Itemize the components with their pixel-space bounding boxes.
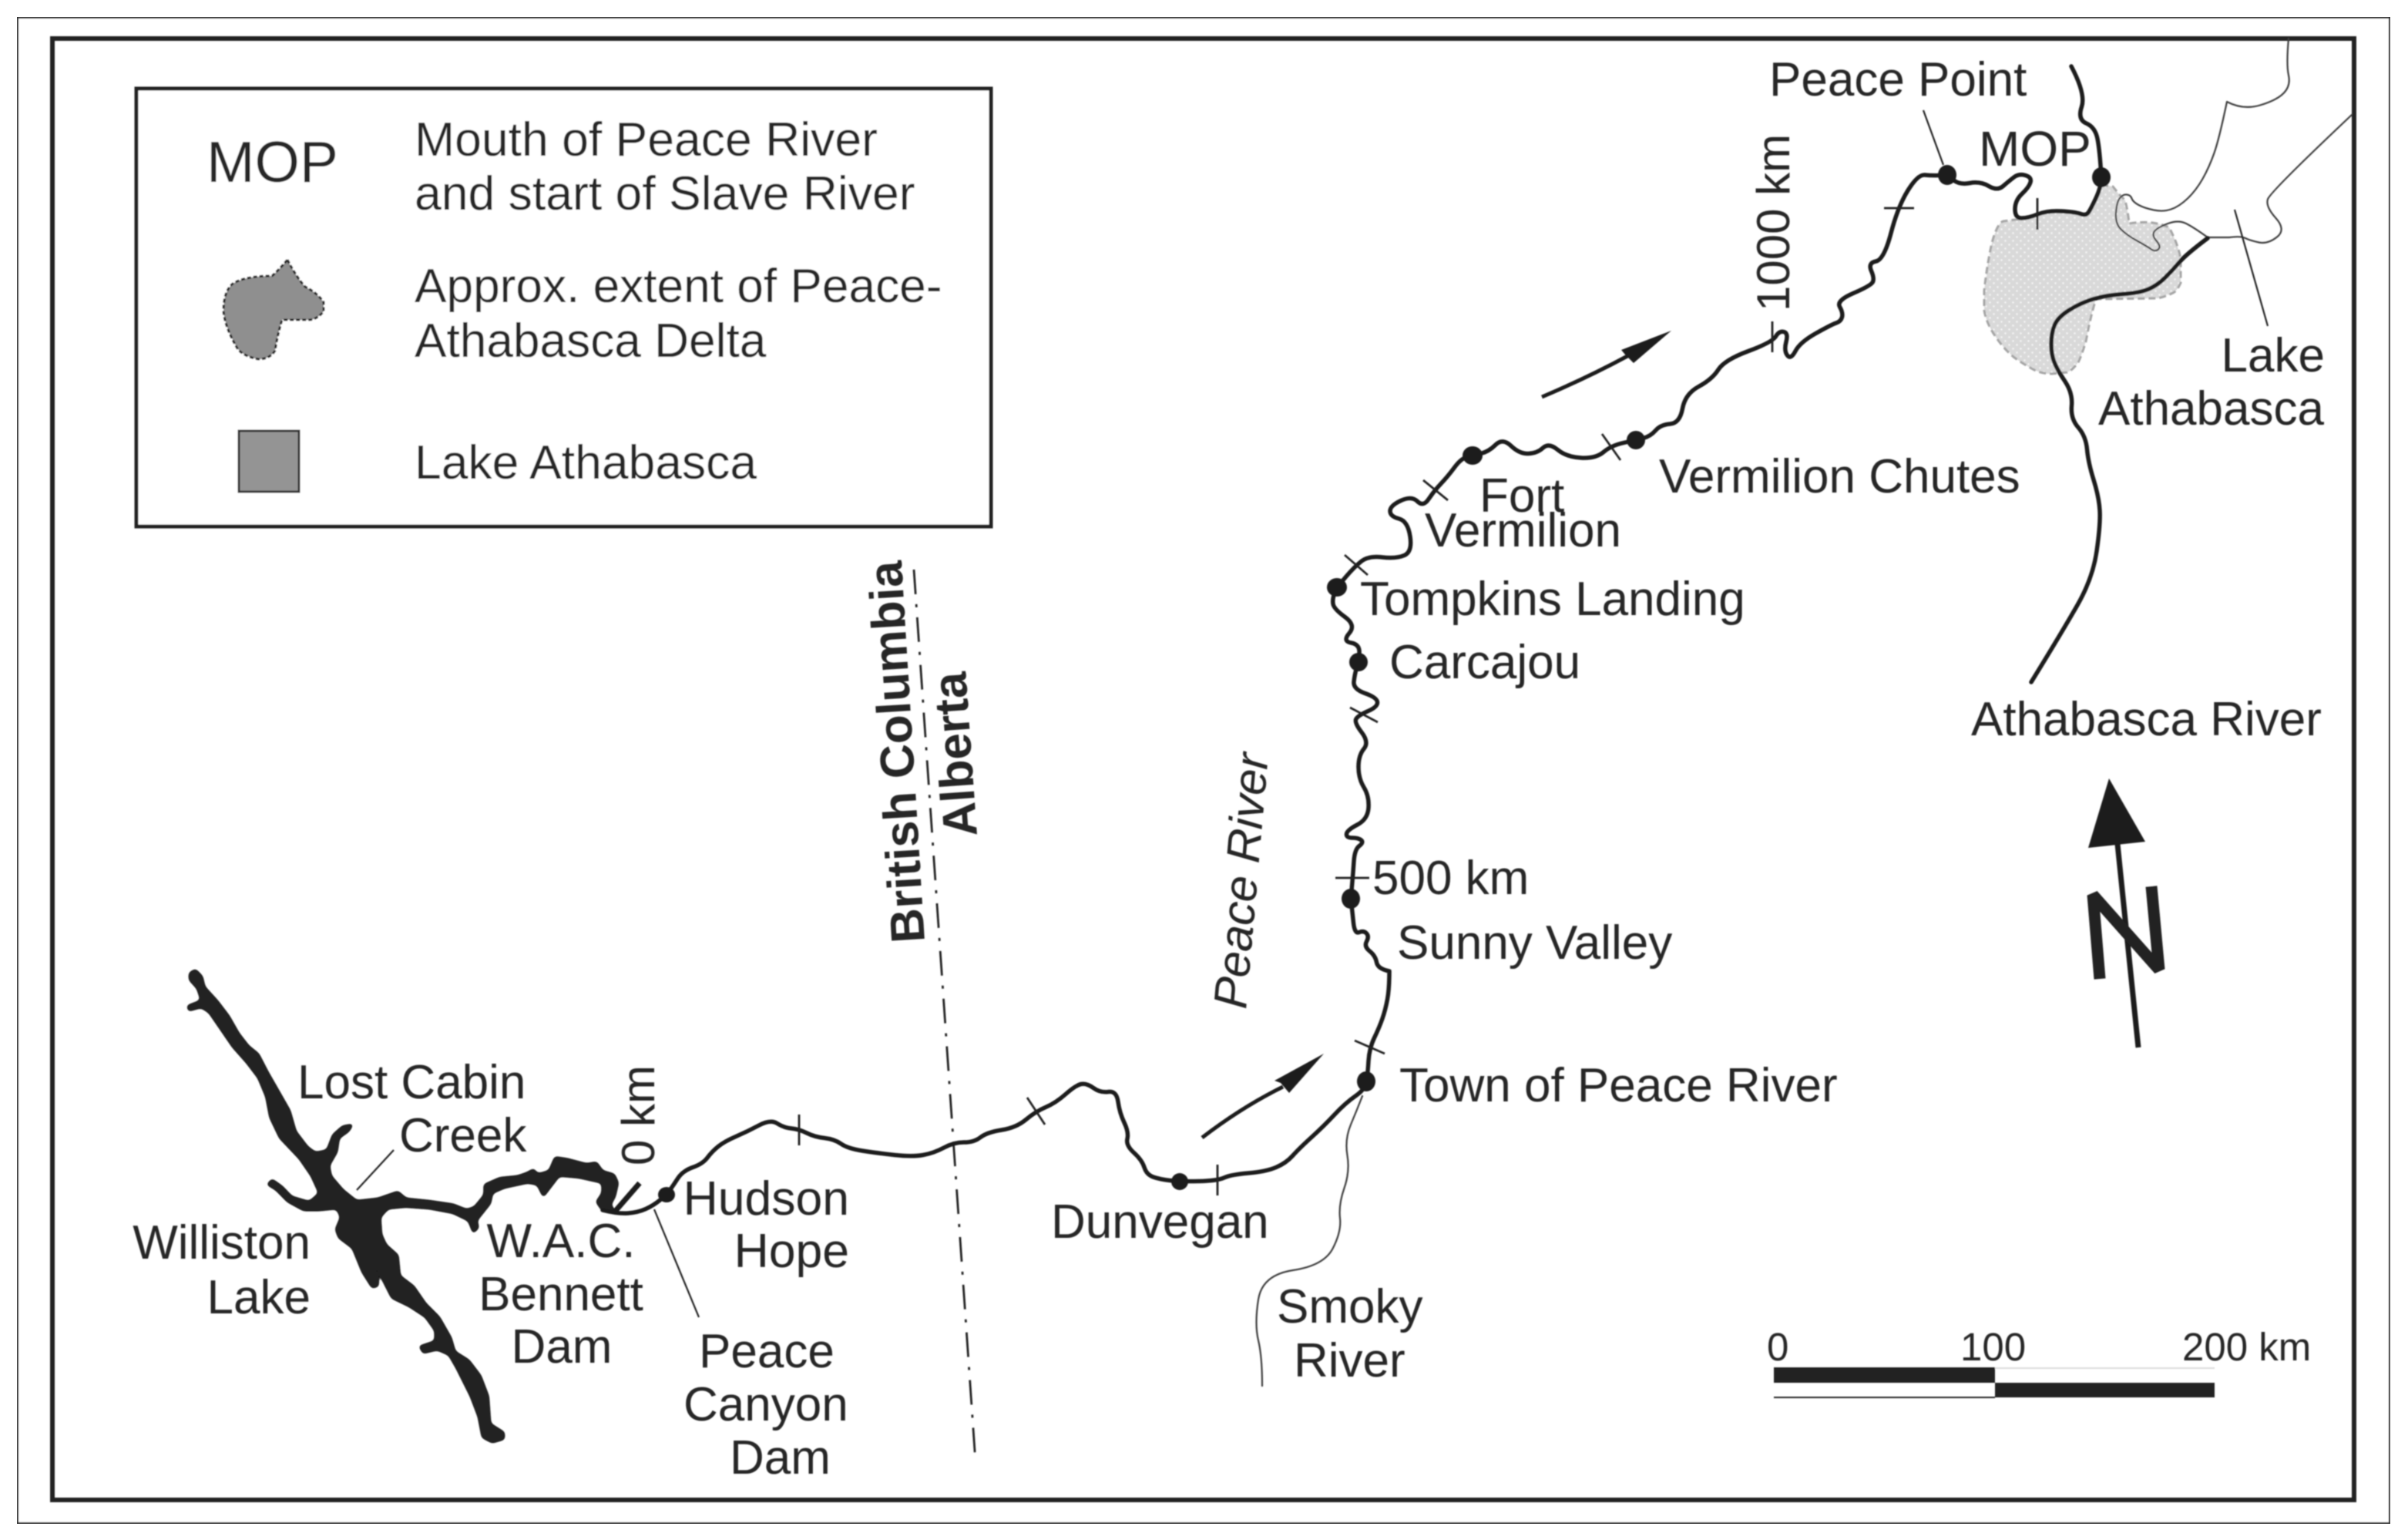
label: Lake Athabasca: Athabasca bbox=[2098, 382, 2325, 435]
label: Athabasca River: Athabasca River bbox=[1971, 693, 2322, 746]
label: W.A.C. Bennett Dam: Bennett bbox=[479, 1268, 643, 1321]
flow arrow lower bbox=[1202, 1054, 1324, 1138]
panel: legend bbox=[136, 89, 991, 526]
Athabasca River bbox=[2031, 238, 2208, 682]
label: Peace Point: Peace Point bbox=[1769, 53, 2027, 106]
label: Vermilion Chutes: Vermilion Chutes bbox=[1659, 450, 2020, 503]
legend: Lake Athabasca bbox=[239, 431, 757, 492]
scale bar: 200 km bbox=[2182, 1325, 2311, 1369]
label: Peace Canyon Dam: Dam bbox=[730, 1431, 831, 1485]
legend: MOP abbreviation: Mouth of Peace River bbox=[415, 113, 878, 166]
label: W.A.C. Bennett Dam: Dam bbox=[512, 1320, 612, 1374]
settlement dots bbox=[658, 165, 2111, 1202]
label: 0 km: 0 km bbox=[613, 1065, 664, 1165]
scale bar: 0 bbox=[1767, 1325, 1788, 1369]
label: 1000 km: 1000 km bbox=[1748, 134, 1799, 311]
label: Town of Peace River: Town of Peace River bbox=[1399, 1059, 1838, 1112]
Peace River main channel bbox=[603, 175, 2101, 1213]
label: Hudson Hope: Hope bbox=[734, 1224, 849, 1278]
label: Tompkins Landing: Tompkins Landing bbox=[1360, 573, 1745, 626]
legend: MOP abbreviation bbox=[207, 113, 915, 220]
label: Dunvegan: Dunvegan bbox=[1051, 1195, 1269, 1249]
label: Carcajou: Carcajou bbox=[1389, 636, 1580, 689]
Smoky River bbox=[1256, 1096, 1362, 1386]
Lake Athabasca shoreline bbox=[2116, 39, 2352, 251]
label: Fort Vermilion: Fort bbox=[1479, 469, 1564, 523]
legend: MOP abbreviation: and start of Slave River bbox=[415, 166, 915, 220]
Slave River bbox=[2071, 66, 2101, 177]
label: Sunny Valley: Sunny Valley bbox=[1397, 916, 1672, 970]
Williston Lake bbox=[187, 970, 618, 1443]
scale bar bbox=[1767, 1325, 2311, 1397]
flow arrow upper bbox=[1542, 331, 1671, 397]
label: Lost Cabin Creek: Lost Cabin bbox=[297, 1056, 526, 1109]
label: Hudson Hope: Hudson bbox=[683, 1172, 849, 1226]
label: British Columbia: British Columbia bbox=[859, 560, 935, 944]
scale bar: 100 bbox=[1960, 1325, 2026, 1369]
label: Peace Canyon Dam: Canyon bbox=[683, 1378, 848, 1431]
north arrow bbox=[2088, 778, 2159, 1047]
label: Lost Cabin Creek: Creek bbox=[399, 1109, 527, 1162]
label: Lake Athabasca: Lake bbox=[2222, 329, 2325, 382]
legend: delta extent: Athabasca Delta bbox=[415, 314, 767, 368]
label: Peace River: Peace River bbox=[1204, 749, 1278, 1010]
distance tick marks bbox=[614, 198, 2037, 1212]
label: Williston Lake: Williston bbox=[133, 1216, 311, 1269]
label: Fort Vermilion: Vermilion bbox=[1425, 504, 1621, 557]
BC-Alberta border bbox=[914, 570, 976, 1462]
legend: Lake Athabasca: Lake Athabasca bbox=[415, 436, 757, 489]
0 km dam marker bbox=[614, 1183, 640, 1212]
Peace-Athabasca Delta shaded area bbox=[1984, 185, 2181, 374]
label: W.A.C. Bennett Dam: W.A.C. bbox=[487, 1215, 635, 1268]
legend: delta extent bbox=[223, 260, 942, 368]
label: Smoky River: River bbox=[1294, 1334, 1406, 1387]
north letter N bbox=[2093, 886, 2159, 979]
label: 500 km: 500 km bbox=[1372, 852, 1529, 905]
label: Peace Canyon Dam: Peace bbox=[699, 1325, 835, 1378]
label: Alberta: Alberta bbox=[923, 670, 988, 839]
label: Williston Lake: Lake bbox=[207, 1271, 311, 1324]
label: Smoky River: Smoky bbox=[1277, 1280, 1422, 1333]
legend: delta extent: Approx. extent of Peace- bbox=[415, 260, 942, 313]
legend: MOP abbreviation: MOP bbox=[207, 129, 338, 194]
label: MOP: MOP bbox=[1979, 121, 2091, 177]
leader lines bbox=[357, 110, 2268, 1317]
